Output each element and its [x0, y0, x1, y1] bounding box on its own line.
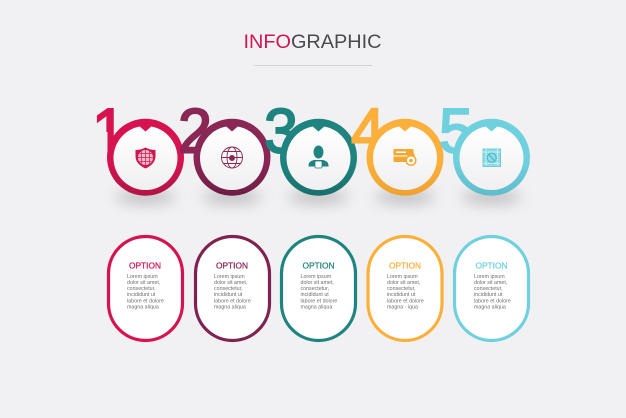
option 1 text: incididunt ut	[127, 292, 156, 298]
step 3 badge	[264, 96, 357, 204]
option 5 text: magna aliqua	[474, 304, 506, 310]
option 5 heading: OPTION	[475, 260, 508, 270]
option 5 text: incididunt ut	[474, 292, 503, 298]
panel: option 1	[108, 236, 182, 340]
option 3 text: incididunt ut	[300, 292, 329, 298]
panel: option 2	[196, 236, 270, 340]
option 4 text: dolor sit amet,	[387, 280, 420, 286]
option 1 text: consectetur,	[127, 286, 156, 292]
option 1 text: magna aliqua	[127, 304, 159, 310]
option 5 text: labore et dolore	[474, 298, 511, 304]
option 3 text: Lorem ipsum	[300, 274, 332, 280]
step 4 badge	[351, 96, 444, 204]
option 2 text: incididunt ut	[214, 292, 243, 298]
number 2: 2	[178, 96, 212, 166]
option 5 text: dolor sit amet,	[474, 280, 507, 286]
option 2 heading: OPTION	[216, 260, 248, 270]
option 4 text: magna · iqua	[387, 304, 418, 310]
icon: globe lock	[222, 147, 242, 168]
panel: option 5	[454, 236, 528, 340]
number 5: 5	[439, 96, 473, 166]
option 1 heading: OPTION	[129, 260, 161, 270]
icon: card lock	[394, 149, 416, 165]
option 5 text: consectetur,	[474, 286, 503, 292]
panel: option 3	[282, 236, 356, 340]
option 3 text: labore et dolore	[300, 298, 337, 304]
option 1 text: labore et dolore	[127, 298, 164, 304]
option 5 text: Lorem ipsum	[474, 274, 505, 280]
option 4 text: consectetur,	[387, 286, 416, 292]
number 3: 3	[264, 96, 298, 166]
panel: option 4	[368, 236, 442, 340]
number 4: 4	[351, 96, 385, 166]
option 2 text: magna aliqua	[214, 304, 246, 310]
option 3 text: magna aliqua	[300, 304, 332, 310]
step 2 badge	[178, 96, 270, 204]
icon: shield globe	[136, 148, 156, 168]
option 4 text: incididunt ut	[387, 292, 416, 298]
option 2 text: Lorem ipsum	[214, 274, 245, 280]
option 3 heading: OPTION	[302, 260, 335, 270]
title underline	[254, 65, 372, 66]
option 1 text: dolor sit amet,	[127, 280, 160, 286]
step 1 badge	[92, 96, 184, 204]
option 2 text: labore et dolore	[214, 298, 251, 304]
option 1 text: Lorem ipsum	[127, 274, 158, 280]
number 1: 1	[92, 96, 126, 166]
option 4 heading: OPTION	[389, 260, 421, 270]
icon: patterned square	[483, 149, 500, 166]
option 3 text: consectetur,	[300, 286, 329, 292]
option 2 text: dolor sit amet,	[214, 280, 247, 286]
option 2 text: consectetur,	[214, 286, 243, 292]
step 5 badge	[439, 96, 530, 204]
icon: person lock	[308, 146, 328, 168]
option 3 text: dolor sit amet,	[300, 280, 334, 286]
title: INFOGRAPHIC	[244, 31, 382, 53]
option 4 text: Lorem ipsum	[387, 274, 418, 280]
option 4 text: labore et dolore	[387, 298, 424, 304]
